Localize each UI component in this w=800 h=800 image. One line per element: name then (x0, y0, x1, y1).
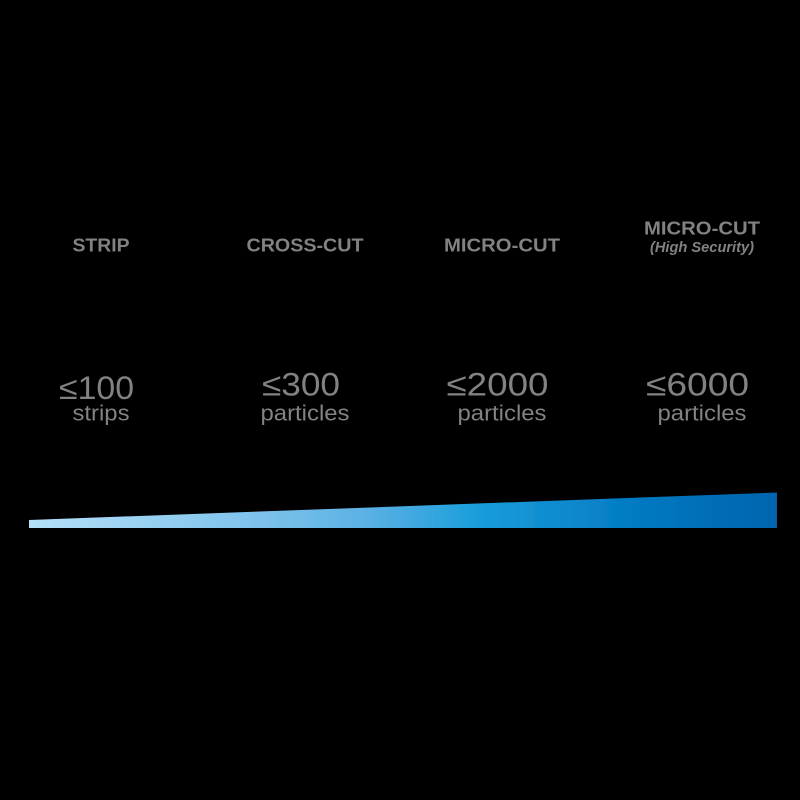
heading: cross-cut: CROSS-CUT (246, 234, 364, 256)
value: micro-cut count (446, 366, 548, 426)
value: strip count: strips (72, 400, 130, 426)
heading: micro-cut high security: MICRO-CUT (644, 218, 761, 238)
heading: micro-cut high security (644, 218, 761, 256)
heading: strip: STRIP (72, 234, 130, 256)
heading: micro-cut: MICRO-CUT (444, 234, 561, 256)
value: cross-cut count (260, 366, 350, 426)
value: strip count: ≤100 (59, 370, 134, 406)
value: micro-cut count: particles (458, 400, 546, 426)
heading: micro-cut high security: (High Security) (650, 240, 754, 256)
value: micro-cut count: ≤2000 (446, 366, 548, 402)
value: high security count (646, 366, 749, 426)
value: cross-cut count: particles (260, 400, 350, 426)
value: strip count (59, 370, 134, 426)
gradient wedge: increasing security (29, 492, 777, 528)
value: cross-cut count: ≤300 (262, 366, 340, 402)
value: high security count: particles (658, 400, 746, 426)
value: high security count: ≤6000 (646, 366, 749, 402)
